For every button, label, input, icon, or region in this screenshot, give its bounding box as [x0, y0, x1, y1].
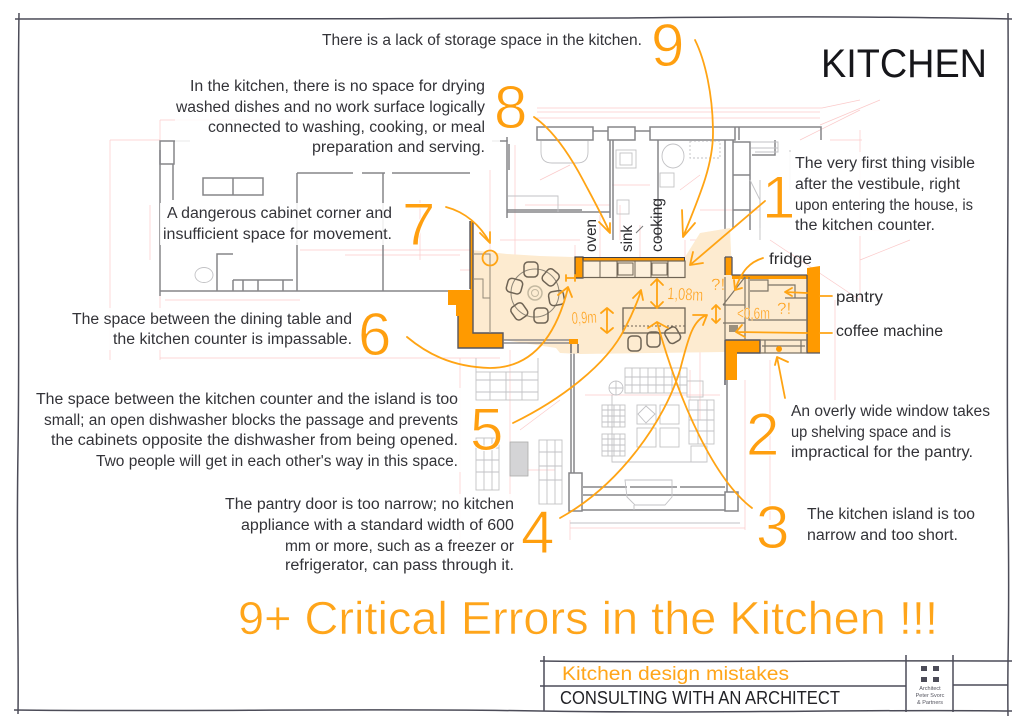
small dimension dining gap [566, 275, 575, 281]
number 1: 1 [762, 164, 795, 231]
note 8: In the kitchen, there is no space for drying [190, 78, 485, 95]
note 8: preparation and serving. [312, 139, 485, 156]
note 5: the cabinets opposite the dishwasher from being opened. [51, 432, 458, 449]
headline: 9+ Critical Errors in the Kitchen !!! [238, 592, 938, 644]
note 3: narrow and too short. [807, 527, 958, 544]
number 7: 7 [402, 191, 435, 258]
note 2: An overly wide window takes [791, 403, 990, 420]
note 3 [807, 506, 975, 544]
logo [916, 666, 945, 706]
number 8: 8 [494, 74, 527, 141]
note 4: mm or more, such as a freezer or [285, 538, 514, 555]
number 9: 9 [651, 12, 684, 79]
question marks: ?! [711, 275, 725, 294]
note 7: A dangerous cabinet corner and [167, 205, 392, 222]
consulting line: CONSULTING WITH AN ARCHITECT [560, 688, 840, 708]
note 6 [72, 311, 352, 348]
note 4: The pantry door is too narrow; no kitchen [225, 496, 514, 513]
number 3: 3 [756, 494, 789, 561]
note 9: There is a lack of storage space in the kitchen. [322, 32, 642, 49]
note 2: up shelving space and is [791, 424, 951, 441]
note 4: appliance with a standard width of 600 [241, 517, 514, 534]
dimension 1,08m: 1,08m [667, 284, 704, 305]
note 1: the kitchen counter. [795, 217, 935, 234]
vertical appliance labels: sink [619, 225, 636, 252]
subject line: Kitchen design mistakes [562, 664, 789, 685]
number 6: 6 [358, 301, 391, 368]
note 6: the kitchen counter is impassable. [113, 331, 352, 348]
living room [569, 353, 738, 511]
dimension 0,9m: 0,9m [571, 308, 597, 328]
note 5: The space between the kitchen counter and the island is too [36, 391, 458, 408]
dimension under 0,6m [712, 304, 770, 323]
lower wall stub [503, 339, 578, 353]
dimension 1,08m [651, 279, 704, 308]
question marks [711, 275, 791, 318]
white backings behind text [30, 75, 996, 576]
note 3: The kitchen island is too [807, 506, 975, 523]
number 5: 5 [470, 396, 503, 463]
arrow 3 [648, 322, 752, 508]
side labels: fridge [769, 251, 812, 268]
note 7 [163, 205, 392, 243]
logo: & Partners [917, 700, 943, 706]
note 1: upon entering the house, is [795, 197, 973, 214]
dimension under 0,6m: <0,6m [737, 304, 770, 323]
arrow 2 [775, 346, 788, 398]
title: KITCHEN [821, 42, 987, 86]
note 1: after the vestibule, right [795, 176, 961, 193]
arrow coffee machine [736, 325, 832, 337]
vertical appliance labels: cooking [649, 198, 666, 252]
title block [540, 655, 1012, 712]
left orange wall [448, 221, 503, 348]
arrow 5 [513, 290, 643, 423]
vertical appliance labels: oven [583, 219, 600, 252]
bar stools [628, 325, 682, 351]
arrow 7 [446, 207, 490, 243]
dining table with chairs [505, 262, 565, 323]
side labels: coffee machine [836, 323, 943, 340]
arrow pantry [785, 288, 832, 296]
note 4 [225, 496, 514, 574]
kitchen island [623, 308, 685, 333]
number 2: 2 [746, 401, 779, 468]
left rooms [160, 141, 470, 296]
number 4: 4 [521, 499, 554, 566]
note 5 [36, 391, 458, 470]
note 5: Two people will get in each other's way in this space. [96, 453, 458, 470]
note 2: impractical for the pantry. [791, 444, 973, 461]
side labels [769, 251, 943, 340]
red dimension lines [110, 100, 910, 560]
note 8 [175, 78, 485, 156]
logo: Architect [919, 686, 941, 692]
arrow 6 [407, 287, 572, 368]
note 8: connected to washing, cooking, or meal [208, 119, 485, 136]
left base cabinets [473, 254, 490, 333]
note 1 [795, 155, 975, 234]
circle marking cabinet corner [482, 250, 498, 266]
arrow 1 [690, 201, 765, 265]
kitchen counter [575, 257, 685, 278]
note 6: The space between the dining table and [72, 311, 352, 328]
top rooms [492, 127, 821, 240]
arrow 4 [560, 315, 707, 518]
vertical appliance labels [583, 198, 666, 252]
question marks: ?! [777, 299, 791, 318]
side labels: pantry [836, 289, 883, 306]
arrow 9 [682, 40, 713, 237]
arrow 8 [534, 117, 610, 233]
right walls and pantry [723, 257, 820, 385]
note 8: washed dishes and no work surface logically [175, 99, 485, 116]
logo: Peter Svorc [916, 693, 945, 699]
arrow fridge [734, 258, 763, 290]
cream kitchen zone [472, 228, 807, 354]
note 7: insufficient space for movement. [163, 226, 392, 243]
note 4: refrigerator, can pass through it. [285, 557, 514, 574]
note 5: small; an open dishwasher blocks the passage and prevents [44, 412, 458, 429]
background floor plan [110, 100, 910, 560]
note 2 [791, 403, 990, 461]
note 1: The very first thing visible [795, 155, 975, 172]
